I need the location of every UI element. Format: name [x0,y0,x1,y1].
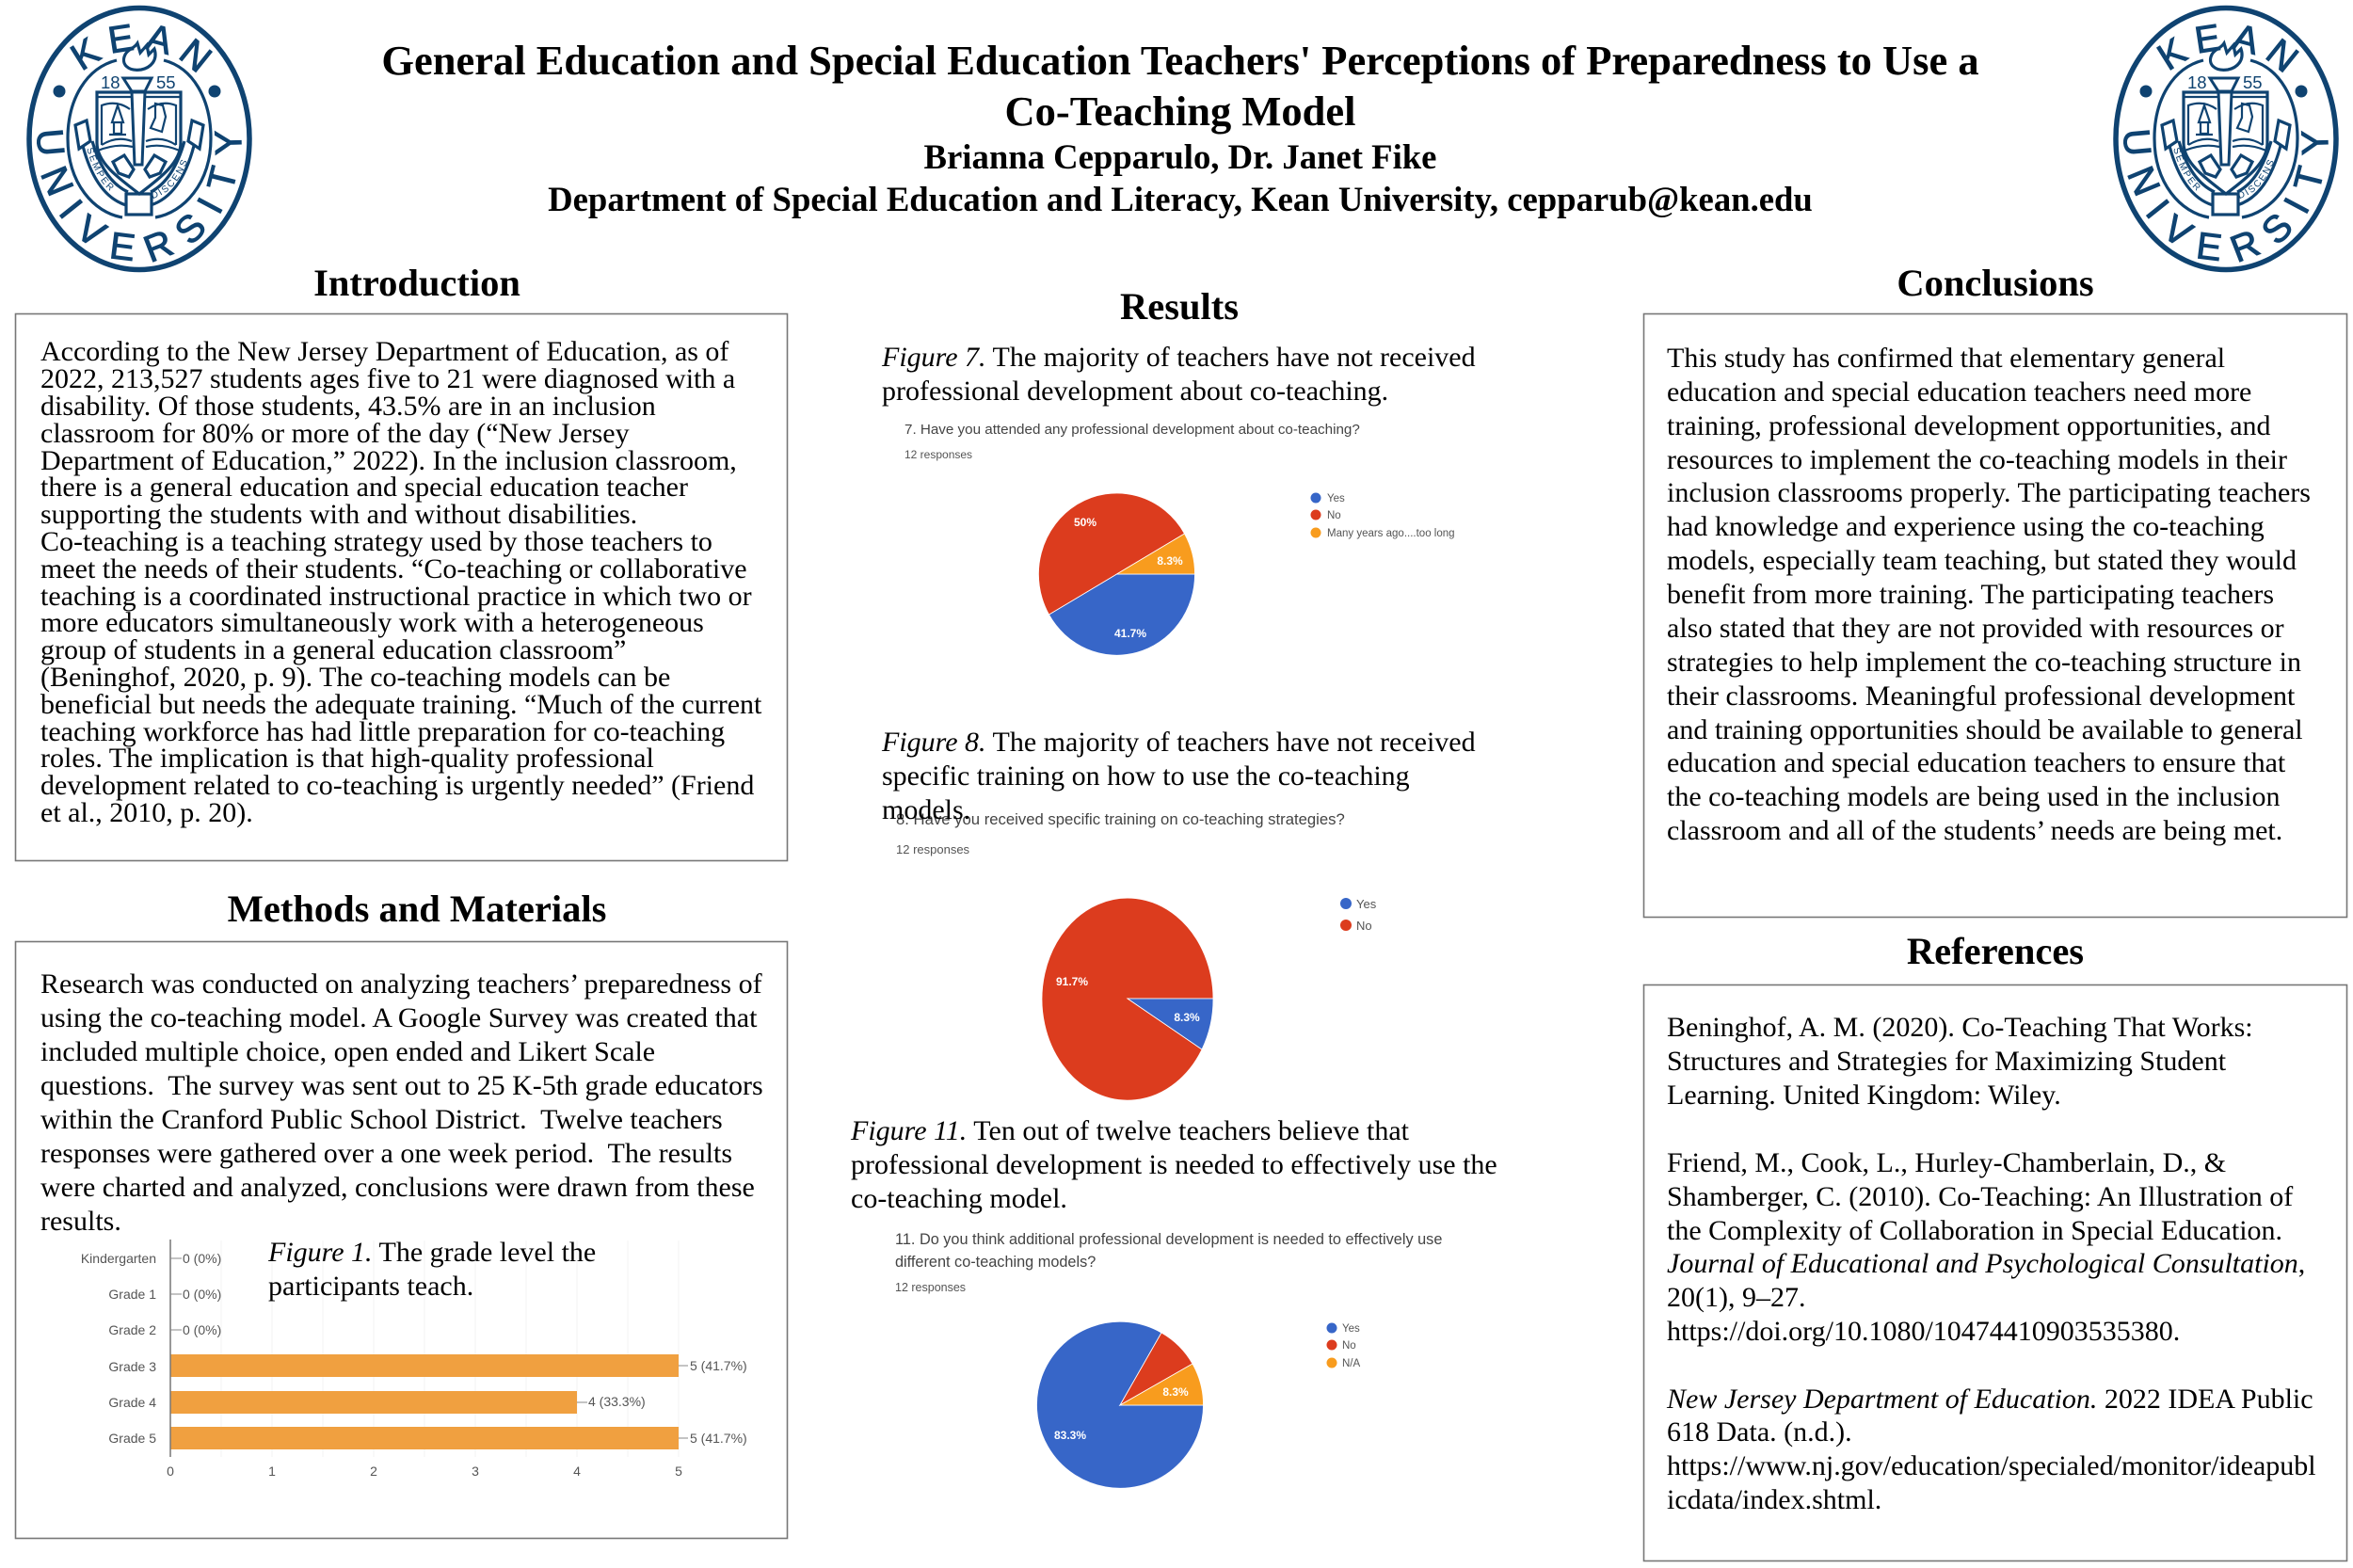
panel: conclusions: benefit from more training. The participating teachers [1667,579,2274,610]
panel: references: Learning. United Kingdom: Wiley. [1667,1080,2061,1111]
pie chart: question 7: 8.3% [1157,554,1183,568]
heading: Conclusions: Conclusions [1897,262,2094,304]
pie chart: question 11: Yes [1342,1323,1360,1335]
logo: Kean University seal (right): SEMPER [2174,148,2201,191]
pie chart: question 11: 8.3% [1162,1385,1189,1399]
bar chart: grade levels: 5 [675,1464,682,1479]
caption: figure 1: participants teach. [268,1271,473,1302]
panel: introduction: According to the New Jersey Department of Education, as of [40,336,728,367]
bar chart: grade levels: 0 [167,1464,174,1479]
panel: methods and materials: responses were gathered over a one week period. The results [40,1138,732,1169]
caption: figure 11: professional development is needed to effectively use the [851,1149,1497,1180]
bar chart: grade levels: 1 [268,1464,276,1479]
panel: conclusions: classroom and all of the students’ needs are being met. [1667,815,2282,846]
panel: introduction: teaching is a coordinated instructional practice in which two or [40,581,752,612]
panel: methods and materials: included multiple choice, open ended and Likert Scale [40,1036,655,1067]
panel: introduction: development related to co-teaching is urgently needed” (Friend [40,770,754,801]
logo: Kean University seal (right): UNIVERSITY [2123,130,2329,263]
pie chart: question 7: 7. Have you attended any professional development about co-teaching? [904,422,1360,438]
pie chart: question 8: 8.3% [1174,1011,1200,1024]
pie chart: question 11: 11. Do you think additional professional development is needed to effectively use [895,1231,1442,1248]
panel: references: the Complexity of Collaboration in Special Education. [1667,1215,2282,1246]
panel: introduction: (Beninghof, 2020, p. 9). The co-teaching models can be [40,662,670,693]
bar chart: grade levels: 0 (0%) [183,1251,221,1266]
panel: introduction: et al., 2010, p. 20). [40,797,253,828]
panel: conclusions: strategies to help implement the co-teaching structure in [1667,647,2301,678]
pie chart: question 11: 12 responses [895,1281,966,1294]
pie chart: question 11 [895,1231,1442,1488]
panel: introduction [15,314,787,860]
panel: conclusions: and training opportunities should be available to general [1667,714,2303,745]
pie chart: question 11: N/A [1342,1358,1361,1369]
title and authors: Co-Teaching Model [1005,88,1355,135]
panel: introduction: teaching workforce has had little preparation for co-teaching [40,716,725,747]
panel: conclusions: resources to implement the co-teaching models in their [1667,444,2287,475]
title and authors: General Education and Special Education Teachers' Perceptions of Preparedness to Use a [381,37,1979,84]
panel: conclusions: the co-teaching models are being used in the inclusion [1667,781,2280,812]
panel: references: 618 Data. (n.d.). [1667,1416,1852,1448]
title and authors: Brianna Cepparulo, Dr. Janet Fike [924,137,1436,176]
panel: conclusions: their classrooms. Meaningful professional development [1667,680,2296,712]
panel: references: Beninghof, A. M. (2020). Co-Teaching That Works: [1667,1012,2253,1043]
panel: results [850,342,1497,1488]
panel: introduction: disability. Of those students, 43.5% are in an inclusion [40,391,656,422]
panel: introduction: supporting the students with and without disabilities. [40,499,637,530]
panel: methods and materials: questions. The survey was sent out to 25 K-5th grade educators [40,1070,763,1101]
bar chart: grade levels: Grade 1 [108,1287,156,1302]
logo: Kean University seal (right): 55 [2243,72,2263,92]
panel: references: 20(1), 9–27. [1667,1282,1805,1313]
logo: Kean University seal (right): 18 [2187,72,2207,92]
panel: references: https://www.nj.gov/education/specialed/monitor/ideapubl [1667,1450,2316,1481]
panel: methods and materials: using the co-teaching model. A Google Survey was created that [40,1002,758,1033]
bar chart: grade levels: 0 (0%) [183,1322,221,1337]
bar chart: grade levels: Grade 3 [108,1359,156,1374]
bar chart: grade levels: 2 [370,1464,377,1479]
pie chart: question 8: Yes [1356,897,1377,911]
pie chart: question 8: 12 responses [896,842,970,856]
logo: Kean University seal (left): SEMPER [87,148,113,191]
panel: conclusions [1643,314,2347,917]
heading: Results: Results [1120,285,1239,328]
logo: Kean University seal (left) [26,6,252,273]
title and authors [381,37,1979,218]
panel: references: New Jersey Department of Education. 2022 IDEA Public [1666,1384,2313,1415]
panel: introduction: Department of Education,” 2022). In the inclusion classroom, [40,445,737,476]
pie chart: question 7: Yes [1327,493,1345,504]
bar chart: grade levels: Grade 4 [108,1395,156,1410]
panel: references: Friend, M., Cook, L., Hurley-Chamberlain, D., & [1667,1147,2226,1178]
pie chart: question 11: No [1342,1340,1356,1352]
caption: figure 8: Figure 8. The majority of teachers have not received [881,727,1476,758]
panel: references [1643,984,2347,1560]
panel: methods and materials: within the Cranford Public School District. Twelve teachers [40,1104,723,1135]
pie chart: question 11: different co-teaching models? [895,1254,1096,1271]
panel: introduction: beneficial but needs the adequate training. “Much of the current [40,689,762,720]
logo: Kean University seal (left): DISCENS [152,160,186,199]
panel: references: Shamberger, C. (2010). Co-Teaching: An Illustration of [1667,1181,2293,1212]
panel: introduction: there is a general education and special education teacher [40,472,688,503]
panel: references: https://doi.org/10.1080/10474410903535380. [1667,1316,2180,1347]
caption: figure 8 [881,727,1476,825]
logo: Kean University seal (right): DISCENS [2240,160,2274,199]
pie chart: question 7: 12 responses [904,448,972,461]
panel: conclusions: models, especially team teaching, but stated they would [1667,545,2297,576]
logo: Kean University seal (left): 55 [156,72,176,92]
bar chart: grade levels: Grade 2 [108,1322,156,1337]
bar chart: grade levels: 4 [573,1464,581,1479]
panel: conclusions: training, professional development opportunities, and [1667,410,2271,441]
panel: conclusions: education and special education teachers need more [1667,376,2251,408]
bar chart: grade levels: 5 (41.7%) [690,1358,747,1373]
panel: methods and materials [15,941,787,1538]
pie chart: question 7: Many years ago....too long [1327,528,1455,539]
bar chart: grade levels: Kindergarten [81,1251,156,1266]
caption: figure 1: Figure 1. The grade level the [267,1237,596,1268]
title and authors: Department of Special Education and Literacy, Kean University, cepparub@kean.edu [548,180,1813,218]
panel: introduction: group of students in a general education classroom” [40,634,626,665]
caption: figure 8: models. [882,794,970,825]
pie chart: question 7: No [1327,510,1341,521]
panel: references: Journal of Educational and Psychological Consultation, [1667,1248,2305,1279]
bar chart: grade levels: 3 [472,1464,479,1479]
panel: conclusions: This study has confirmed that elementary general [1667,343,2225,374]
panel: conclusions: also stated that they are not provided with resources or [1667,613,2284,644]
caption: figure 8: specific training on how to use the co-teaching [882,760,1410,792]
panel: introduction: Co-teaching is a teaching strategy used by those teachers to [40,526,712,557]
pie chart: question 7: 41.7% [1114,627,1146,640]
logo: Kean University seal (right): KEAN [2156,24,2299,73]
panel: introduction: classroom for 80% or more of the day (“New Jersey [40,418,630,449]
caption: figure 11 [850,1115,1497,1214]
bar chart: grade levels: 5 (41.7%) [690,1431,747,1446]
logo: Kean University seal (left): UNIVERSITY [37,130,242,263]
heading: Methods and Materials: Methods and Materials [228,888,606,930]
caption: figure 7 [881,342,1476,407]
caption: figure 11: co-teaching model. [851,1183,1067,1214]
heading: Introduction: Introduction [313,262,520,304]
caption: figure 7: professional development about co-teaching. [882,376,1388,407]
heading: References: References [1907,930,2084,972]
logo: Kean University seal (left): KEAN [70,24,213,73]
panel: references: icdata/index.shtml. [1667,1484,1881,1515]
caption: figure 1 [267,1237,596,1302]
panel: methods and materials: results. [40,1206,121,1237]
panel: introduction: roles. The implication is that high-quality professional [40,743,654,774]
pie chart: question 8: 91.7% [1056,975,1088,988]
panel: references: Structures and Strategies for Maximizing Student [1667,1046,2227,1077]
pie chart: question 11: 83.3% [1054,1429,1086,1442]
pie chart: question 7: 50% [1074,516,1096,529]
panel: introduction: meet the needs of their students. “Co-teaching or collaborative [40,553,747,584]
pie chart: question 8 [896,810,1377,1100]
panel: methods and materials: Research was conducted on analyzing teachers’ preparedness of [40,968,762,1000]
panel: conclusions: had knowledge and experience using the co-teaching [1667,511,2265,542]
panel: methods and materials: were charted and analyzed, conclusions were drawn from these [40,1172,755,1203]
panel: conclusions: inclusion classrooms properly. The participating teachers [1667,477,2311,508]
bar chart: grade levels [81,1240,747,1479]
bar chart: grade levels: Grade 5 [108,1431,156,1446]
caption: figure 7: Figure 7. The majority of teachers have not received [881,342,1476,373]
logo: Kean University seal (right) [2113,6,2339,273]
panel: conclusions: education and special education teachers to ensure that [1667,747,2286,778]
panel: introduction: more educators simultaneously work with a heterogeneous [40,607,704,638]
pie chart: question 7 [904,422,1455,655]
pie chart: question 8: 8. Have you received specific training on co-teaching strategies? [896,810,1345,828]
pie chart: question 8: No [1356,919,1372,933]
caption: figure 11: Figure 11. Ten out of twelve teachers believe that [850,1115,1410,1146]
panel: introduction: 2022, 213,527 students ages five to 21 were diagnosed with a [40,363,735,394]
logo: Kean University seal (left): 18 [101,72,120,92]
bar chart: grade levels: 0 (0%) [183,1287,221,1302]
bar chart: grade levels: 4 (33.3%) [588,1394,646,1409]
